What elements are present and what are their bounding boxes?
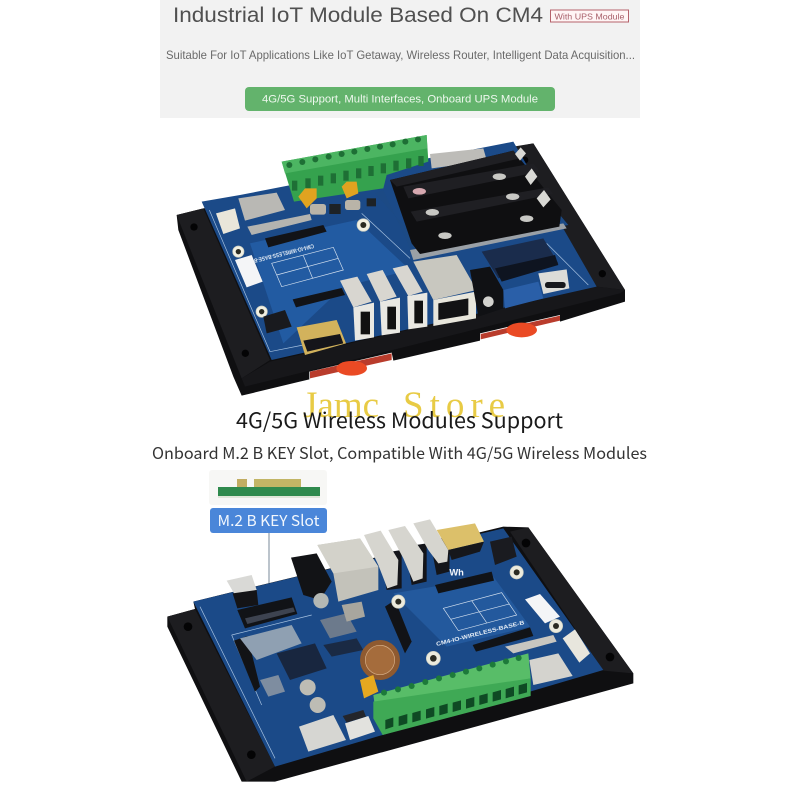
callout leader line (268, 533, 270, 585)
watermark (303, 385, 511, 426)
usb-c port (538, 269, 569, 294)
board silk model name: CM4-IO-WIRELESS-BASE-B (436, 620, 525, 648)
badge: with UPS module (550, 10, 628, 22)
power chip area (482, 238, 558, 308)
dc jack (291, 553, 332, 600)
watermark: Store (403, 385, 511, 426)
watermark: Jamc (303, 385, 379, 426)
white label strip (525, 594, 560, 623)
usb ports (364, 519, 450, 590)
ups circuit area (240, 602, 365, 697)
icon: m.2 module card (218, 479, 320, 498)
orange jumpers and inductors (298, 182, 376, 215)
green feature pill (245, 87, 555, 111)
din rail tray (167, 527, 633, 782)
pin header (263, 310, 292, 333)
ribbon connectors (435, 572, 557, 653)
red din clips (310, 316, 560, 378)
product photo: bottom board with terminal block (167, 519, 633, 782)
wave logo: Wh (449, 568, 464, 578)
orange jumper (360, 675, 378, 698)
m.2 slot (237, 597, 297, 628)
board outline lines (200, 607, 312, 758)
board outline lines (209, 210, 588, 352)
green feature pill: 4G/5G Support, Multi Interfaces, Onboard UPS Module (262, 94, 538, 106)
white label strip (235, 255, 263, 287)
silk diagram (443, 593, 517, 631)
m.2 module callout (209, 470, 327, 585)
din rail tray (177, 143, 625, 396)
title: Industrial IoT Module Based On CM4 (173, 4, 543, 27)
blue circuit board (202, 142, 597, 360)
green terminal block (373, 653, 531, 735)
electrolytic capacitor (313, 593, 329, 608)
ups battery holder board (375, 147, 568, 260)
coin battery holder (360, 640, 400, 680)
ribbon connectors (247, 214, 345, 307)
product photo: top board with battery holder (177, 135, 625, 396)
micro sd card slot (238, 193, 285, 221)
header panel (160, 0, 640, 118)
pin header (490, 537, 517, 565)
mounting holes (392, 566, 563, 665)
badge: with UPS module: With UPS Module (554, 12, 625, 22)
white 4 pin connector (563, 629, 590, 663)
silk diagram (272, 247, 343, 287)
ethernet port (317, 538, 378, 602)
hdmi port (297, 320, 346, 355)
hdmi port (437, 523, 484, 560)
black socket header (385, 600, 412, 653)
ethernet port (413, 255, 477, 326)
mounting holes (233, 219, 370, 317)
section subheading: Onboard M.2 B KEY Slot, Compatible With 4G/5G Wireless Modules (152, 440, 647, 464)
board silk model name: CM4-IO-WIRELESS-BASE-B (253, 242, 314, 263)
dc jack (470, 267, 503, 317)
blue circuit board (193, 528, 603, 767)
callout label: M.2 B KEY Slot (218, 510, 320, 531)
white 4 pin connector (216, 208, 240, 234)
green terminal block (282, 135, 428, 202)
usb ports (340, 265, 427, 341)
micro sd card slot (529, 653, 573, 685)
sim card and switch (299, 679, 375, 752)
usb-c and switch row (430, 148, 487, 168)
usb-c port (227, 575, 257, 595)
section heading: 4G/5G Wireless Modules Support (236, 405, 563, 435)
subtitle: Suitable For IoT Applications Like IoT Getaway, Wireless Router, Intelligent Data Acquisition... (166, 48, 635, 62)
